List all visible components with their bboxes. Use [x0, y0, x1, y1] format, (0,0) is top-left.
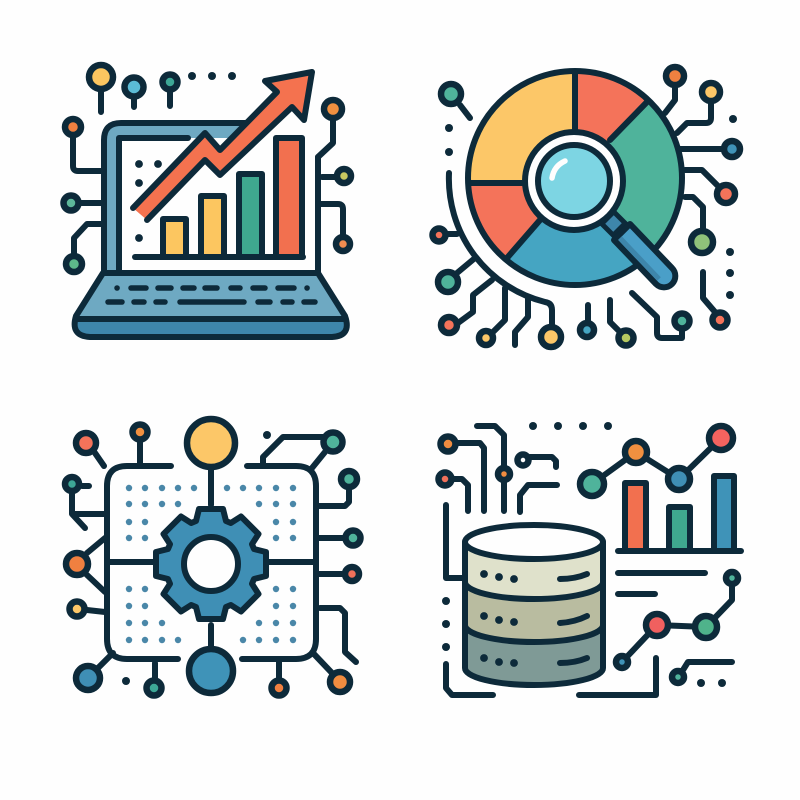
circuit nodes around gear — [65, 424, 360, 696]
bottom blue node — [189, 649, 233, 693]
dot grid — [126, 485, 296, 643]
rounded frame and connectors — [107, 466, 316, 659]
top yellow node — [187, 419, 235, 467]
circuit arc and nodes — [432, 67, 740, 347]
circuit traces and nodes — [438, 422, 732, 695]
icon: database cylinder — [465, 525, 603, 685]
panel: laptop with growth chart — [64, 65, 351, 337]
second line chart — [616, 572, 738, 668]
line chart — [580, 426, 733, 496]
panel: gear network — [65, 419, 360, 696]
pie chart — [468, 71, 682, 285]
icon: gear — [156, 509, 266, 619]
panel: pie chart with magnifier — [432, 67, 740, 347]
bar chart — [135, 138, 303, 257]
text lines — [618, 573, 705, 594]
screen dots — [135, 160, 162, 242]
icon: magnifying glass — [525, 132, 675, 287]
panel: database with charts — [438, 422, 741, 695]
bar chart — [618, 476, 741, 551]
laptop screen and lid — [104, 123, 318, 273]
circuit nodes around laptop — [64, 65, 351, 272]
icon: rising arrow — [133, 72, 312, 220]
laptop keyboard base — [75, 273, 347, 337]
